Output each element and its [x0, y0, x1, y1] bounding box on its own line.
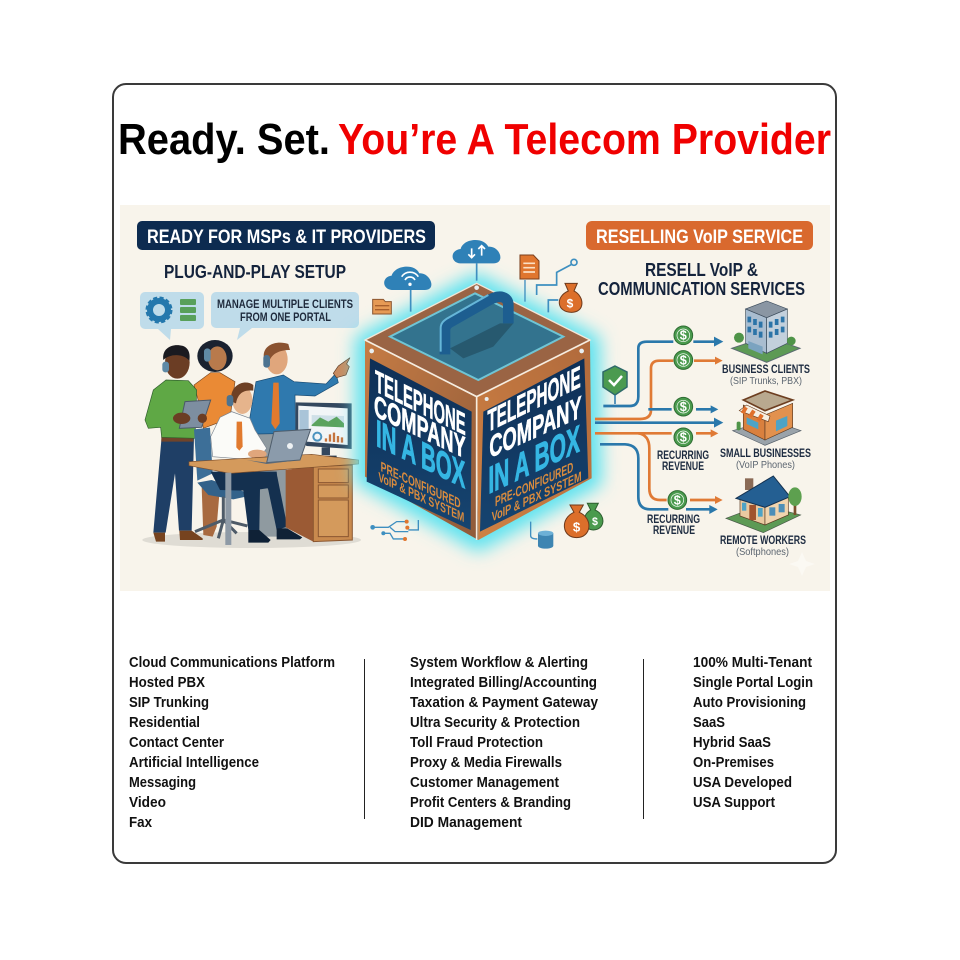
- feature list column one: SIP Trunking: [129, 695, 209, 711]
- orange second: [595, 429, 712, 437]
- arrowheads: [709, 337, 723, 514]
- speech bubble: manage multiple clients: MANAGE MULTIPLE CLIENTS: [217, 297, 353, 311]
- feature list column two: System Workflow & Alerting: [410, 655, 588, 671]
- revenue coins: $: [680, 329, 687, 343]
- icon: money bag top: $: [567, 297, 574, 311]
- box top with handle: [365, 283, 590, 397]
- feature list column one: Hosted PBX: [129, 675, 205, 691]
- label: business clients: [722, 364, 810, 387]
- desk: [189, 454, 359, 545]
- feature list column two: DID Management: [410, 815, 522, 831]
- circuit lines: [537, 264, 572, 312]
- heading: resell VoIP: [598, 259, 805, 299]
- feature list column three: USA Developed: [693, 775, 792, 791]
- banner: reselling VoIP service: [586, 221, 813, 250]
- feature list column three: 100% Multi-Tenant: [693, 655, 812, 671]
- label: remote workers: REMOTE WORKERS: [720, 535, 806, 547]
- computer monitor: [296, 402, 352, 458]
- outer rounded frame: [113, 84, 836, 863]
- circuit nodes: [370, 520, 418, 541]
- heading: plug-and-play setup: PLUG-AND-PLAY SETUP: [164, 261, 346, 282]
- recurring revenue label upper: REVENUE: [662, 461, 704, 473]
- speech bubble: manage multiple clients: [211, 292, 359, 340]
- revenue coins: $: [674, 493, 681, 507]
- recurring revenue label upper: [657, 450, 709, 473]
- icon: house: [726, 476, 802, 533]
- banner: reselling VoIP service: RESELLING VoIP SERVICE: [596, 227, 803, 248]
- revenue coins: $: [680, 353, 687, 367]
- label: small businesses: (VoIP Phones): [736, 460, 795, 471]
- feature list column one: Cloud Communications Platform: [129, 655, 335, 671]
- box right face: [477, 340, 592, 540]
- telephone company box: [365, 283, 592, 540]
- feature list column three: Auto Provisioning: [693, 695, 806, 711]
- blue main flow: [595, 419, 717, 427]
- person: woman in orange: [194, 340, 235, 537]
- banner: ready for MSPs: [137, 221, 435, 250]
- icon: document: [520, 255, 539, 302]
- illustration panel: [120, 205, 830, 591]
- box glow: [360, 278, 597, 547]
- box left face: COMPANY: [374, 388, 466, 465]
- feature list column three: Hybrid SaaS: [693, 735, 771, 751]
- recurring revenue label lower: REVENUE: [653, 525, 695, 537]
- recurring revenue label upper: RECURRING: [657, 450, 709, 462]
- icon: money bags bottom: $: [573, 520, 581, 535]
- revenue coins: $: [680, 431, 687, 445]
- revenue flow arrows: [595, 337, 723, 514]
- label: remote workers: [720, 535, 806, 558]
- floating tech icons around box: [370, 240, 603, 549]
- speech bubble: gear and servers: [140, 292, 204, 340]
- icon: shield check: [603, 366, 627, 404]
- label: business clients: BUSINESS CLIENTS: [722, 364, 810, 376]
- blue lower branch: [600, 444, 712, 509]
- label: remote workers: (Softphones): [736, 547, 789, 558]
- feature list column two: Proxy & Media Firewalls: [410, 755, 562, 771]
- feature list column one: [129, 655, 335, 831]
- heading: resell VoIP: RESELL VoIP &: [645, 259, 758, 280]
- label: business clients: (SIP Trunks, PBX): [730, 376, 802, 387]
- feature list column three: SaaS: [693, 715, 725, 731]
- feature list column three: Single Portal Login: [693, 675, 813, 691]
- box left face: TELEPHONE: [375, 364, 466, 442]
- icon: money bag top: [559, 283, 582, 312]
- box right face: IN A BOX: [488, 418, 580, 503]
- feature list column three: [693, 655, 813, 811]
- feature list column three: On-Premises: [693, 755, 774, 771]
- recurring revenue label lower: RECURRING: [647, 514, 700, 526]
- icon: storefront: [733, 391, 801, 445]
- feature list column one: Contact Center: [129, 735, 224, 751]
- blue top flow: [603, 342, 717, 406]
- box right face: VoIP & PBX SYSTEM: [492, 468, 582, 524]
- feature list column two: [410, 655, 598, 831]
- chair: [194, 428, 253, 538]
- feature list column one: Fax: [129, 815, 152, 831]
- feature list column one: Messaging: [129, 775, 196, 791]
- box right face: COMPANY: [489, 389, 582, 465]
- box right face: TELEPHONE: [487, 359, 581, 439]
- label: small businesses: SMALL BUSINESSES: [720, 448, 811, 460]
- icon: database: [531, 522, 553, 549]
- icon: sync cloud: [453, 240, 500, 281]
- feature list column two: Profit Centers & Branding: [410, 795, 571, 811]
- box right face: PRE-CONFIGURED: [495, 460, 573, 510]
- blue second: [648, 405, 712, 413]
- label: small businesses: [720, 448, 811, 471]
- orange lower branch: [638, 433, 717, 500]
- feature list column two: Customer Management: [410, 775, 559, 791]
- title: You’re A Telecom Provider: [338, 115, 831, 164]
- people at desk: [142, 340, 361, 548]
- sparkle: [789, 552, 815, 576]
- feature list column two: Ultra Security & Protection: [410, 715, 580, 731]
- icon: wifi cloud: [384, 267, 431, 312]
- icon: office building: [732, 301, 800, 362]
- title: Ready. Set.: [118, 115, 330, 164]
- speech bubble: manage multiple clients: FROM ONE PORTAL: [240, 310, 331, 324]
- revenue coins: [668, 326, 693, 509]
- heading: resell VoIP: COMMUNICATION SERVICES: [598, 278, 805, 299]
- icon: folder: [373, 299, 391, 314]
- icon: money bags bottom: [564, 503, 603, 538]
- person: standing man pointing: [248, 343, 350, 537]
- feature list column two: Taxation & Payment Gateway: [410, 695, 598, 711]
- person: man in green: [145, 345, 211, 542]
- person: seated man: [211, 382, 302, 543]
- banner: ready for MSPs: READY FOR MSPs & IT PROVIDERS: [147, 227, 426, 248]
- laptop: [247, 429, 311, 464]
- feature list column two: Integrated Billing/Accounting: [410, 675, 597, 691]
- feature list column one: Residential: [129, 715, 200, 731]
- title: [118, 115, 831, 164]
- revenue coins: $: [680, 400, 687, 414]
- feature list column two: Toll Fraud Protection: [410, 735, 543, 751]
- box left face: [365, 340, 478, 540]
- feature list column three: USA Support: [693, 795, 775, 811]
- box left face: IN A BOX: [376, 412, 465, 497]
- recurring revenue label lower: [647, 514, 700, 537]
- box left face: PRE-CONFIGURED: [381, 460, 461, 512]
- feature list column one: Artificial Intelligence: [129, 755, 259, 771]
- box left face: VoIP & PBX SYSTEM: [378, 469, 464, 525]
- orange top flow: [595, 361, 717, 419]
- icon: money bags bottom: $: [592, 516, 598, 528]
- feature list column one: Video: [129, 795, 166, 811]
